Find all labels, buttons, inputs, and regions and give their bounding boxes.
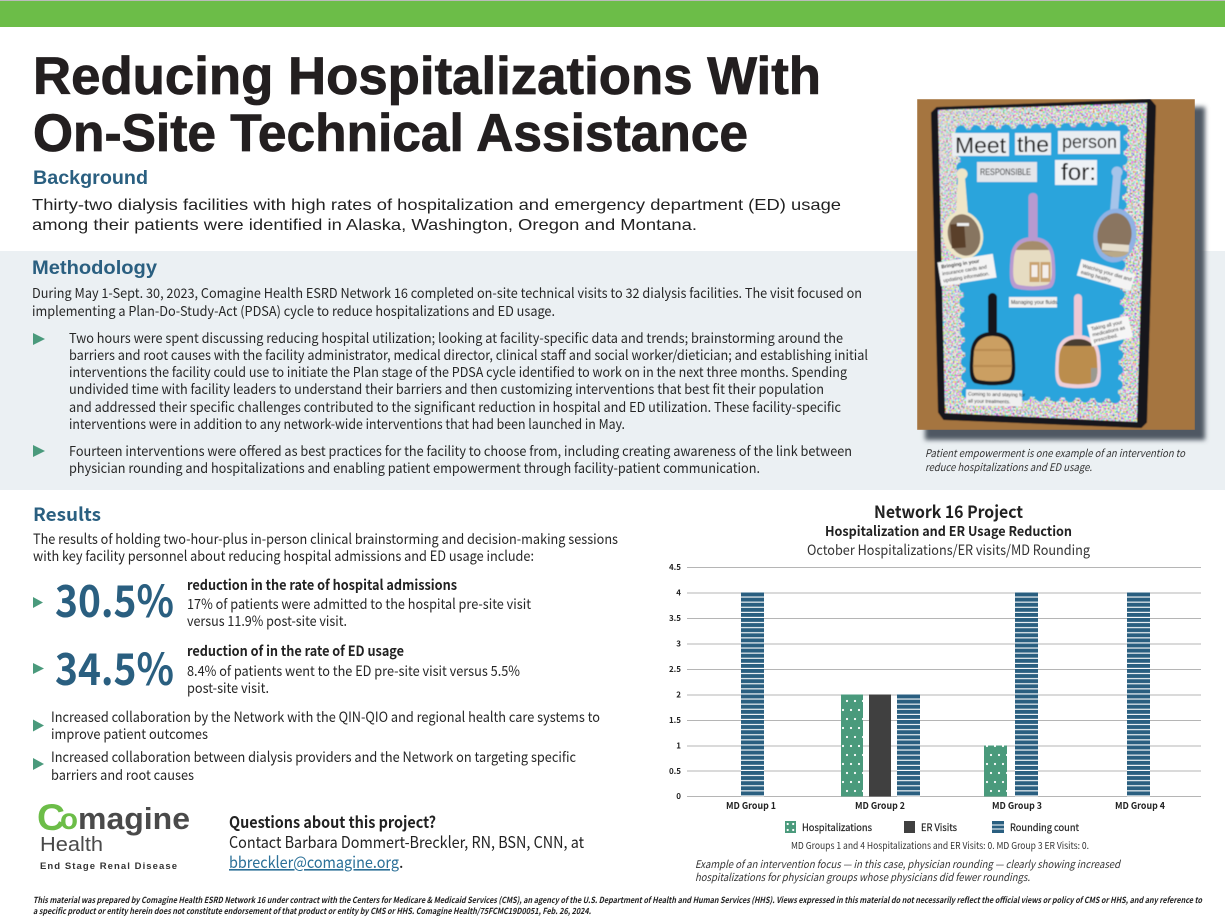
chart title: October Hospitalizations/ER visits/MD Rounding	[807, 540, 1090, 560]
note labels: eating healthy.	[1080, 270, 1112, 284]
logo: Comagine Health: o	[60, 803, 78, 836]
grid lines and y axis: 4.5	[669, 562, 681, 573]
note labels: Bringing in your	[941, 258, 980, 270]
bullet: fourteen interventions: physician rounding and hospitalizations and enabling patient empowerment through facility-patient communication.	[69, 457, 760, 477]
grid lines and y axis: 3.5	[669, 613, 681, 624]
chart caption: Example of an intervention focus — in this case, physician rounding — clearly showing increased	[695, 857, 1121, 872]
contact block: Contact Barbara Dommert-Breckler, RN, BSN, CNN, at	[229, 829, 584, 853]
top green banner	[0, 0, 1225, 27]
grid lines and y axis: 2.5	[669, 664, 681, 675]
heading: results: Results	[33, 501, 101, 527]
logo: Comagine Health	[37, 797, 190, 872]
grid lines and y axis: 0.5	[669, 766, 681, 777]
bullet: QIN-QIO collaboration: Increased collaboration by the Network with the QIN-QIO and regional health care systems to	[51, 707, 600, 727]
title	[33, 47, 821, 163]
bullet: QIN-QIO collaboration: improve patient outcomes	[51, 724, 208, 744]
grid lines and y axis: 3	[676, 638, 681, 650]
text block: results intro: with key facility personnel about reducing hospital admissions and ED usage include:	[33, 546, 534, 566]
bullet: two hours: interventions were in addition to any network-wide interventions that had been launched in May.	[69, 413, 625, 433]
logo: Comagine Health: End Stage Renal Disease	[40, 861, 177, 872]
sign words: RESPONSIBLE	[980, 167, 1031, 177]
heading: background: Background	[33, 168, 148, 189]
contact block: Questions about this project?	[229, 809, 436, 833]
bullet: two hours	[33, 327, 868, 433]
bullet: fourteen interventions	[33, 440, 852, 477]
logo: Comagine Health: Health	[40, 834, 103, 856]
note labels: medications as	[1092, 325, 1126, 338]
grid lines and y axis: 4	[676, 588, 681, 598]
bars	[741, 592, 1150, 796]
sign words: for:	[1061, 159, 1096, 185]
text block: methodology intro: implementing a Plan-Do-Study-Act (PDSA) cycle to reduce hospitalizations and ED usage.	[32, 300, 555, 320]
note labels: prescribed.	[1093, 333, 1119, 344]
sign words	[952, 131, 1120, 185]
statistic: 34.5% ED usage: post-site visit.	[187, 678, 269, 698]
x axis labels	[726, 798, 1165, 812]
grid lines and y axis: 0	[676, 791, 681, 802]
statistic: 34.5% ED usage: 34.5%	[55, 634, 174, 698]
sign words: person	[1062, 132, 1117, 152]
panel: background	[32, 168, 841, 234]
x axis labels: MD Group 3	[992, 798, 1042, 812]
statistic: 34.5% ED usage: 8.4% of patients went to the ED pre-site visit versus 5.5%	[187, 661, 520, 681]
grid lines and y axis: 1.5	[669, 715, 681, 726]
statistic: 30.5% hospital admissions	[33, 566, 532, 631]
icon: black mirror	[968, 293, 1018, 386]
bullet: two hours: interventions the facility could use to initiate the Plan stage of the PDSA cycle identified to work on in the next three months. Spending	[69, 361, 847, 381]
statistic: 34.5% ED usage	[33, 634, 520, 698]
chart title: Network 16 Project	[874, 498, 1023, 523]
sign words: Meet	[955, 133, 1006, 158]
logo: Comagine Health: C	[37, 797, 65, 838]
photo caption: reduce hospitalizations and ED usage.	[925, 460, 1092, 475]
icon: pink mirror	[1053, 294, 1103, 389]
note labels: Coming to and staying for	[968, 392, 1025, 399]
note labels: insurance cards and	[942, 264, 988, 277]
note labels: Managing your fluids.	[1011, 300, 1059, 306]
chart title	[807, 498, 1090, 560]
legend	[785, 819, 1079, 834]
contact block: .	[399, 849, 403, 873]
legend: Hospitalizations	[802, 819, 872, 834]
title: Reducing Hospitalizations With	[33, 47, 821, 106]
contact block: bbreckler@comagine.org	[229, 849, 399, 873]
icon: blue mirror	[1092, 166, 1137, 264]
photo: patient empowerment bulletin board	[917, 99, 1205, 440]
panel: results	[33, 501, 618, 785]
text block: results intro	[33, 529, 618, 566]
text block: methodology intro: During May 1-Sept. 30, 2023, Comagine Health ESRD Network 16 completed on-site technical visits to 32 dialysis facilities. The visit focused on	[32, 282, 862, 302]
title: On-Site Technical Assistance	[33, 104, 748, 163]
bullet: provider collaboration	[33, 747, 576, 785]
text block: background description	[32, 197, 841, 234]
icon: purple mirror	[1008, 193, 1058, 291]
bullet: provider collaboration: barriers and root causes	[51, 765, 194, 785]
contact block	[229, 809, 584, 873]
note labels: all your treatments.	[968, 399, 1011, 405]
statistic: 30.5% hospital admissions: versus 11.9% post-site visit.	[187, 611, 347, 631]
logo: Comagine Health: magine	[78, 801, 190, 836]
heading: methodology: Methodology	[32, 258, 157, 279]
photo caption	[925, 446, 1186, 475]
bullet: fourteen interventions: Fourteen interventions were offered as best practices for the facility to choose from, including creating awareness of the link between	[69, 440, 852, 460]
bullet: two hours: Two hours were spent discussing reducing hospital utilization; looking at facility-specific data and trends; brainstorming around the	[69, 327, 843, 347]
chart note: MD Groups 1 and 4 Hospitalizations and ER Visits: 0. MD Group 3 ER Visits: 0.	[791, 838, 1089, 852]
footer disclaimer	[33, 894, 1203, 917]
photo caption: Patient empowerment is one example of an intervention to	[925, 446, 1186, 461]
chart caption	[695, 857, 1121, 885]
grid lines and y axis	[669, 562, 1201, 802]
grid lines and y axis: 2	[676, 690, 681, 700]
note labels	[937, 254, 1135, 407]
text block: methodology intro	[32, 282, 862, 320]
note labels: updating information.	[943, 271, 990, 284]
text block: background description: Thirty-two dialysis facilities with high rates of hospitalization and emergency department (ED) usage	[32, 197, 841, 214]
x axis labels: MD Group 1	[726, 798, 776, 812]
legend: Rounding count	[1010, 819, 1079, 834]
statistic: 30.5% hospital admissions: reduction in the rate of hospital admissions	[187, 575, 457, 595]
text block: background description: among their patients were identified in Alaska, Washington, Oregon and Montana.	[32, 217, 697, 234]
x axis labels: MD Group 2	[855, 798, 905, 812]
text block: results intro: The results of holding two-hour-plus in-person clinical brainstorming and decision-making sessions	[33, 529, 618, 549]
chart caption: hospitalizations for physician groups whose physicians did fewer roundings.	[695, 870, 1030, 885]
bar chart: Network 16 Project	[669, 498, 1201, 885]
bullet: QIN-QIO collaboration	[33, 707, 600, 744]
footer disclaimer: a specific product or entity herein does not constitute endorsement of that product or entity by CMS or HHS. Comagine Health/75FCMC19D0051, Feb. 26, 2024.	[33, 905, 591, 917]
statistic: 34.5% ED usage: reduction of in the rate of ED usage	[187, 641, 404, 661]
note labels: Watching your diet and	[1082, 263, 1133, 283]
bullet: two hours: barriers and root causes with the facility administrator, medical director, clinical staff and social worker/dietician; and establishing initial	[69, 344, 868, 364]
statistic: 30.5% hospital admissions: 30.5%	[55, 566, 174, 630]
bullet: two hours: and addressed their specific challenges contributed to the significant reduction in hospital and ED utilization. These facility-specific	[69, 396, 841, 416]
x axis labels: MD Group 4	[1115, 798, 1165, 812]
note labels: Taking all your	[1091, 320, 1123, 333]
chart title: Hospitalization and ER Usage Reduction	[825, 520, 1072, 540]
bullet: provider collaboration: Increased collaboration between dialysis providers and the Network on targeting specific	[51, 747, 576, 767]
sign words: the	[1017, 132, 1049, 157]
grid lines and y axis: 1	[676, 740, 681, 752]
bullet: two hours: undivided time with facility leaders to understand their barriers and then customizing interventions that best fit their population	[69, 378, 824, 398]
legend: ER Visits	[921, 819, 957, 834]
statistic: 30.5% hospital admissions: 17% of patients were admitted to the hospital pre-site visit	[187, 594, 532, 614]
icon: cream mirror	[942, 168, 984, 260]
panel: methodology	[0, 251, 1225, 490]
